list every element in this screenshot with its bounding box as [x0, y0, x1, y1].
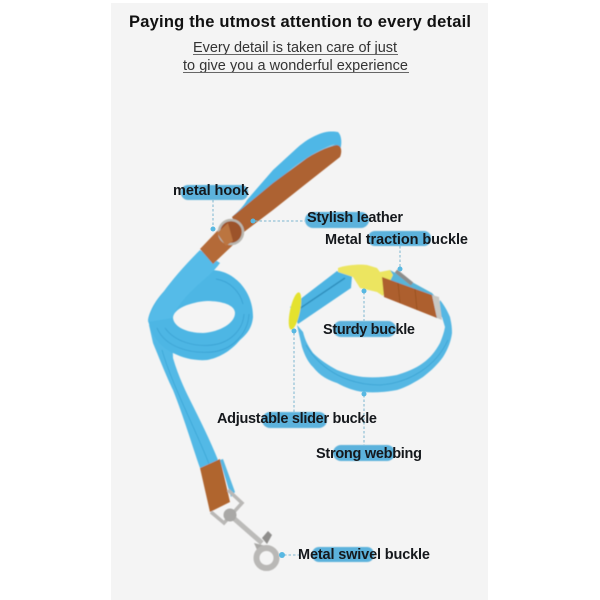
subtitle [183, 40, 409, 74]
label: metal hook [173, 183, 250, 232]
handle leather [232, 145, 341, 235]
label: strong webbing [316, 392, 422, 462]
title: Paying the utmost attention to every detail [129, 13, 471, 31]
metal tip [432, 295, 442, 320]
label: sturdy buckle [323, 288, 415, 338]
label: strong webbing: Strong webbing [316, 446, 422, 462]
leash long strand [149, 325, 218, 468]
subtitle: to give you a wonderful experience [183, 58, 408, 74]
collar top strap [384, 270, 438, 300]
leash strand to handle [148, 250, 220, 322]
label: stylish leather: Stylish leather [307, 210, 403, 226]
collar front band [290, 271, 352, 324]
label: stylish leather [250, 210, 403, 228]
label: metal swivel buckle: Metal swivel buckle [298, 547, 430, 563]
hook ring [254, 543, 276, 568]
label: adjustable slider buckle: Adjustable slider buckle [217, 411, 377, 427]
label: adjustable slider buckle [217, 328, 377, 428]
collar back band [297, 300, 452, 392]
leather lower tab [200, 228, 233, 264]
label: metal traction buckle [325, 231, 468, 272]
label: sturdy buckle: Sturdy buckle [323, 322, 415, 338]
traction ring [396, 271, 412, 284]
collar illustration [286, 265, 452, 392]
label: metal hook: metal hook [173, 183, 250, 199]
yellow buckle [338, 265, 393, 296]
handle loop blue [232, 131, 341, 217]
subtitle: Every detail is taken care of just [193, 40, 397, 56]
yellow slider [286, 291, 304, 331]
D ring [217, 220, 243, 246]
label: metal traction buckle: Metal traction buckle [325, 232, 468, 248]
bottom leather [200, 459, 230, 512]
swivel shaft [224, 508, 272, 544]
background panel [111, 3, 488, 600]
leash illustration [148, 131, 341, 568]
leash coil [148, 270, 253, 360]
swivel ring [211, 490, 242, 523]
collar leather [382, 277, 437, 318]
